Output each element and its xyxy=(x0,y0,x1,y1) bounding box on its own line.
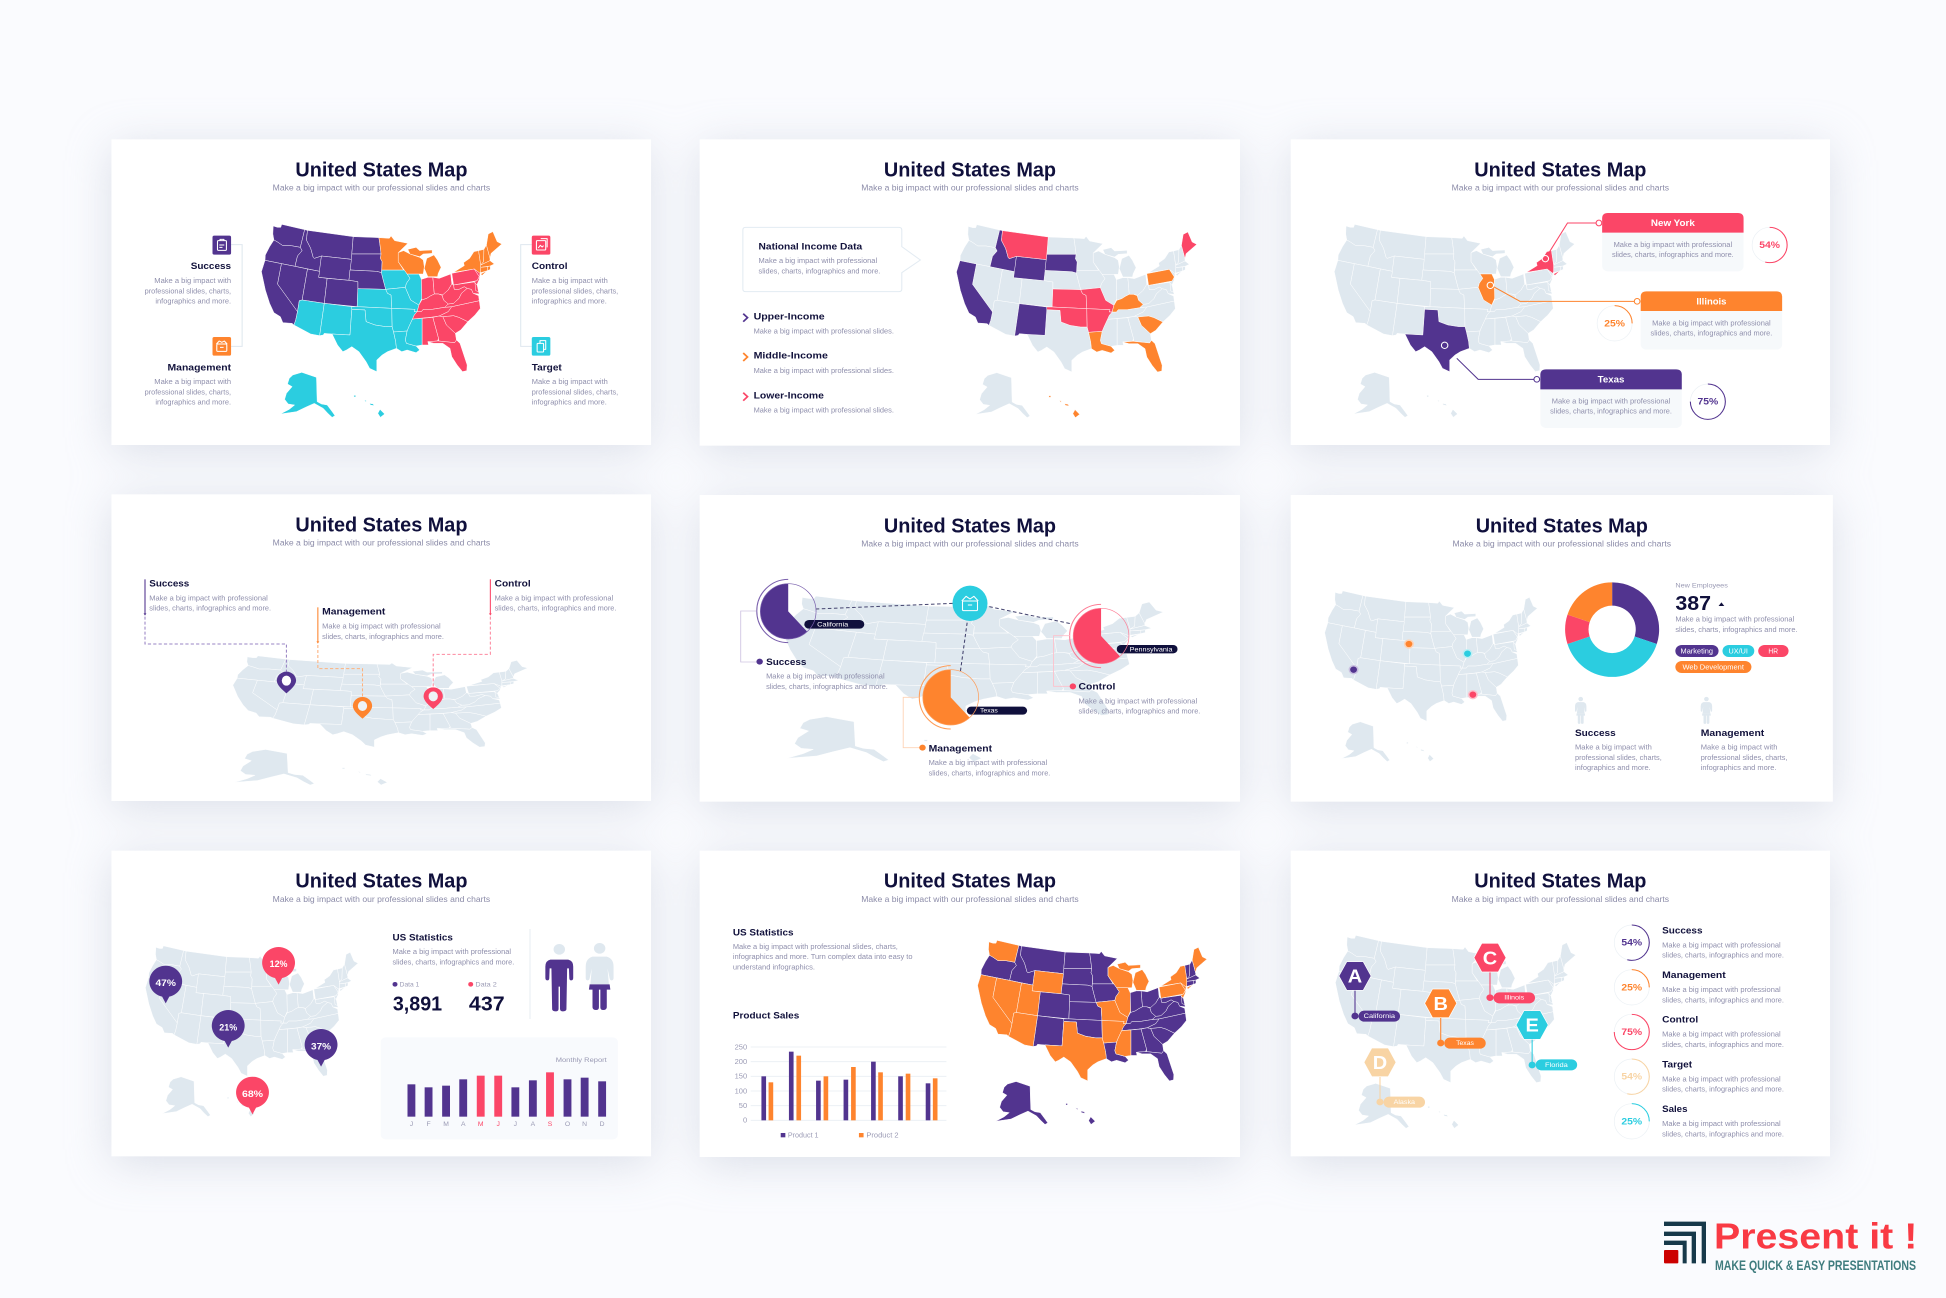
list item: success xyxy=(1614,925,1784,960)
icon: cyan box circle xyxy=(952,586,987,621)
text: success: professional slides, charts, xyxy=(1575,753,1662,762)
list item: control: Control xyxy=(1662,1015,1698,1026)
map: NY, IL, TX highlighted xyxy=(1334,224,1575,417)
percent ring: 25%: 25% xyxy=(1604,319,1625,329)
label: management xyxy=(903,697,1050,777)
marker: B Texas: Texas xyxy=(1456,1040,1475,1047)
legend pills: UX/UI xyxy=(1729,647,1748,655)
bar chart: monthly report: Monthly Report xyxy=(556,1057,607,1064)
card: new york: slides, charts, infographics and more. xyxy=(1612,250,1734,259)
text: success xyxy=(144,579,271,616)
list item: success: slides, charts, infographics and more. xyxy=(1662,951,1784,960)
text: us statistics: Make a big impact with professional slides, charts, xyxy=(733,942,898,951)
list item: target xyxy=(1614,1059,1784,1094)
list item: sales: 25% xyxy=(1621,1117,1643,1127)
balloon: 21% xyxy=(212,1010,245,1048)
stat: data 2 xyxy=(468,982,505,1015)
text: us statistics: US Statistics xyxy=(733,928,794,938)
bar chart: monthly report: D xyxy=(600,1121,605,1128)
marker: E Florida: Florida xyxy=(1545,1062,1568,1069)
list item: sales: Sales xyxy=(1662,1104,1687,1115)
callout: national income data: slides, charts, infographics and more. xyxy=(759,267,880,275)
panel: US statistics with balloons xyxy=(111,851,651,1156)
list item: lower income: Lower-Income xyxy=(754,391,825,401)
balloon: 37% xyxy=(305,1029,337,1067)
icon: control document xyxy=(532,236,550,255)
list item: upper income xyxy=(743,312,894,335)
label: management: Management xyxy=(929,744,993,754)
list item: target: Make a big impact with professional xyxy=(1662,1075,1781,1083)
text: target: Target xyxy=(532,363,563,373)
card: illinois xyxy=(1641,291,1782,350)
callout: national income data: National Income Data xyxy=(759,242,863,252)
text: management xyxy=(145,363,232,406)
icon: logo mark xyxy=(1664,1222,1706,1263)
label: control: slides, charts, infographics and more. xyxy=(1079,707,1200,716)
percent ring: 25% xyxy=(1597,306,1632,341)
text: control xyxy=(489,579,616,616)
map: two-colour states xyxy=(978,940,1207,1124)
label: management: Make a big impact with professional xyxy=(929,758,1047,767)
donut chart xyxy=(1565,582,1659,677)
title: United States Map xyxy=(295,514,467,536)
card: illinois: slides, charts, infographics and more. xyxy=(1651,329,1772,337)
label: management: slides, charts, infographics and more. xyxy=(929,769,1050,777)
text: success: professional slides, charts, xyxy=(145,287,231,295)
percent ring: 75% xyxy=(1690,384,1725,419)
callout: national income data: Make a big impact with professional xyxy=(759,256,877,265)
subtitle: Make a big impact with our professional slides and charts xyxy=(1452,183,1670,193)
text: success: slides, charts, infographics and more. xyxy=(149,604,271,613)
stat: data 2: 437 xyxy=(469,992,505,1015)
card: texas xyxy=(1540,369,1682,428)
text: management: professional slides, charts, xyxy=(145,388,231,396)
legend pills: Web Development xyxy=(1682,663,1744,671)
panel: new employees donut xyxy=(1291,495,1833,802)
map: highlighted income states xyxy=(956,225,1197,418)
list item: success: Success xyxy=(1662,926,1702,936)
balloon: 47%: 47% xyxy=(156,978,176,989)
text: success: Make a big impact with xyxy=(1575,743,1652,752)
title: United States Map xyxy=(1474,870,1646,892)
text: management: professional slides, charts, xyxy=(1701,753,1787,762)
list item: target: slides, charts, infographics and more. xyxy=(1662,1085,1784,1094)
label: success: slides, charts, infographics and more. xyxy=(766,682,888,691)
stat: new employees xyxy=(1675,583,1797,634)
logo: Present it xyxy=(1664,1216,1917,1273)
balloon: 68% xyxy=(236,1077,269,1114)
pie: pennsylvania: Pennsylvania xyxy=(1130,647,1173,653)
card: texas: Texas xyxy=(1598,375,1624,385)
bar chart: product sales: 250 xyxy=(735,1043,747,1051)
text: success: infographics and more. xyxy=(155,297,231,305)
stat: data 2: Data 2 xyxy=(475,982,497,988)
balloon: 37%: 37% xyxy=(311,1042,331,1052)
panel: national income data xyxy=(700,139,1240,446)
text: management: Management xyxy=(1701,728,1765,739)
panel: product sales xyxy=(700,851,1240,1157)
icon: man figure xyxy=(545,944,573,1011)
percent ring: 54%: 54% xyxy=(1759,240,1780,251)
text: success: Success xyxy=(191,261,231,272)
map: grey US xyxy=(1325,591,1537,762)
legend pills xyxy=(1675,645,1789,673)
text: success xyxy=(145,261,231,305)
text: control: Make a big impact with professional xyxy=(495,594,614,602)
bar chart: monthly report: M xyxy=(443,1121,449,1128)
list item: success: Make a big impact with professional xyxy=(1662,941,1781,949)
subtitle: Make a big impact with our professional slides and charts xyxy=(273,538,491,548)
pie: texas xyxy=(919,666,1027,729)
list item: success: 54% xyxy=(1621,938,1643,949)
text: success: Success xyxy=(149,579,189,589)
text: success xyxy=(1575,728,1662,772)
label: control: Make a big impact with professional xyxy=(1079,697,1197,705)
chart legend: Product 1 xyxy=(788,1131,819,1139)
dashed leader: management xyxy=(318,645,362,697)
title: United States Map xyxy=(1476,515,1648,537)
icon: person management xyxy=(1701,697,1712,724)
marker: D Alaska: D xyxy=(1373,1053,1387,1074)
dashed connectors xyxy=(816,603,1072,672)
text: management: Make a big impact with xyxy=(1701,743,1777,752)
dashed leader: control xyxy=(433,617,490,687)
text: control: Control xyxy=(495,579,531,589)
icon: success clipboard xyxy=(212,236,231,255)
list item: sales xyxy=(1614,1104,1784,1139)
list item: upper income: Upper-Income xyxy=(754,312,825,323)
text: management: infographics and more. xyxy=(1701,763,1776,772)
balloon: 68%: 68% xyxy=(242,1089,263,1100)
text: management: infographics and more. xyxy=(155,398,231,406)
bar chart: product sales: 100 xyxy=(735,1087,747,1095)
heading: product sales: Product Sales xyxy=(733,1011,799,1021)
text: success: Make a big impact with professional xyxy=(149,594,268,602)
list item: lower income: Make a big impact with professional slides. xyxy=(754,406,894,415)
list item: management: Make a big impact with professional xyxy=(1662,985,1781,994)
label: success: Make a big impact with professional xyxy=(766,672,885,681)
balloon: 12%: 12% xyxy=(270,959,288,970)
bar chart: monthly report: A xyxy=(531,1121,536,1128)
marker: A California: California xyxy=(1364,1013,1395,1020)
panel: hexagon markers with percentages xyxy=(1291,851,1830,1156)
text: target: infographics and more. xyxy=(532,398,607,406)
stat: new employees: New Employees xyxy=(1675,583,1729,590)
marker: B Texas: B xyxy=(1433,994,1448,1015)
bar chart: monthly report: O xyxy=(565,1121,570,1128)
list item: middle income xyxy=(743,351,894,375)
card: new york: New York xyxy=(1651,218,1696,228)
list item: control: 75% xyxy=(1621,1027,1643,1038)
marker: C Illinois xyxy=(1474,943,1535,1003)
legend pills: HR xyxy=(1768,647,1778,655)
text: control: infographics and more. xyxy=(532,297,607,305)
map: wide grey US xyxy=(233,656,528,785)
connector: texas xyxy=(1441,342,1540,382)
list item: management: slides, charts, infographics and more. xyxy=(1662,996,1784,1004)
pie: california: California xyxy=(817,622,849,628)
bar chart: monthly report: M xyxy=(478,1121,484,1128)
bar chart: product sales: 50 xyxy=(739,1101,747,1110)
text: us statistics: slides, charts, infographics and more. xyxy=(392,958,514,966)
label: success xyxy=(741,611,888,691)
list item: management xyxy=(1614,970,1784,1005)
pin: purple xyxy=(277,672,296,693)
bar chart: monthly report: J xyxy=(514,1121,517,1128)
text: success: infographics and more. xyxy=(1575,763,1651,772)
text: success: Success xyxy=(1575,728,1616,739)
stat: data 1: 3,891 xyxy=(393,992,442,1015)
stat: new employees: 387 xyxy=(1675,592,1711,615)
text: management: Management xyxy=(167,363,232,373)
pin: orange xyxy=(353,697,372,719)
text: management xyxy=(316,607,444,644)
panel: state callouts xyxy=(1291,139,1830,445)
chart legend: Product 2 xyxy=(866,1131,899,1139)
bar chart: product sales: 200 xyxy=(735,1057,747,1066)
bar chart: product sales xyxy=(735,1043,946,1125)
left bracket xyxy=(231,245,242,346)
panel: regions map with four categories xyxy=(111,139,651,445)
text: control: professional slides, charts, xyxy=(532,287,618,295)
connector: new york xyxy=(1542,220,1602,262)
list item: lower income xyxy=(743,391,894,415)
list item: middle income: Middle-Income xyxy=(754,351,829,362)
text: management xyxy=(1701,728,1787,772)
text: us statistics xyxy=(392,933,514,966)
map: grey US xyxy=(145,946,358,1117)
bar chart: monthly report: J xyxy=(497,1121,500,1128)
callout: national income data xyxy=(743,227,920,292)
bar chart: monthly report: J xyxy=(410,1121,413,1128)
stat: data 1 xyxy=(392,982,442,1015)
text: control: slides, charts, infographics and more. xyxy=(495,604,616,613)
text: management: slides, charts, infographics and more. xyxy=(322,632,444,641)
card shadows xyxy=(111,146,1833,1165)
list item: target: 54% xyxy=(1621,1072,1643,1083)
text: control: Control xyxy=(532,261,567,272)
marker: D Alaska: Alaska xyxy=(1394,1099,1415,1106)
bar chart: monthly report: A xyxy=(461,1121,466,1128)
title: United States Map xyxy=(884,159,1056,181)
list item: control: Make a big impact with professional xyxy=(1662,1030,1781,1039)
text: target xyxy=(532,363,618,406)
stat: new employees: Make a big impact with professional xyxy=(1675,615,1795,624)
marker: A California: A xyxy=(1348,966,1362,987)
subtitle: Make a big impact with our professional slides and charts xyxy=(861,894,1079,904)
pie: california xyxy=(757,579,864,643)
subtitle: Make a big impact with our professional slides and charts xyxy=(273,183,491,193)
list item: sales: Make a big impact with professional xyxy=(1662,1119,1781,1128)
card: texas: slides, charts, infographics and more. xyxy=(1550,407,1672,416)
map: stretched grey US xyxy=(784,596,1163,762)
bar chart: monthly report: F xyxy=(427,1121,431,1128)
subtitle: Make a big impact with our professional slides and charts xyxy=(861,539,1079,549)
text: management: Make a big impact with xyxy=(154,377,231,386)
subtitle: Make a big impact with our professional slides and charts xyxy=(273,894,491,904)
icon: person success xyxy=(1575,697,1586,724)
text: us statistics xyxy=(733,928,912,971)
label: control xyxy=(1054,636,1200,716)
balloon: 47% xyxy=(149,966,182,1003)
list item: management: Management xyxy=(1662,970,1727,981)
list item: control: slides, charts, infographics and more. xyxy=(1662,1040,1784,1049)
pie: texas: Texas xyxy=(980,708,999,715)
marker: A California xyxy=(1339,962,1400,1022)
marker: C Illinois: C xyxy=(1483,948,1497,969)
list item: sales: slides, charts, infographics and more. xyxy=(1662,1130,1784,1138)
title: United States Map xyxy=(1474,159,1646,181)
panel: pie charts over map xyxy=(700,495,1240,802)
text: management: Management xyxy=(322,607,386,618)
bar chart: monthly report xyxy=(381,1037,618,1139)
list item: middle income: Make a big impact with professional slides. xyxy=(754,366,894,375)
bar chart: product sales: 150 xyxy=(735,1072,747,1081)
text: us statistics: US Statistics xyxy=(392,933,453,943)
marker: C Illinois: Illinois xyxy=(1504,995,1525,1002)
chart legend xyxy=(781,1131,899,1139)
list item: control xyxy=(1614,1014,1784,1050)
balloon: 12% xyxy=(262,947,295,985)
list item: target: Target xyxy=(1662,1060,1693,1070)
text: success: Make a big impact with xyxy=(154,276,231,285)
percent ring: 54% xyxy=(1752,227,1787,263)
label: control: Control xyxy=(1079,682,1115,693)
logo wordmark: Present it ! xyxy=(1714,1216,1917,1257)
card: illinois: Make a big impact with professional xyxy=(1652,319,1771,327)
map: grey US xyxy=(1335,935,1576,1128)
text: target: Make a big impact with xyxy=(532,377,608,386)
bar chart: product sales: 0 xyxy=(743,1116,747,1125)
title: United States Map xyxy=(884,515,1056,537)
text: control xyxy=(532,261,618,305)
bar chart: monthly report: S xyxy=(548,1121,553,1128)
list item: upper income: Make a big impact with professional slides. xyxy=(754,327,894,335)
connector: illinois xyxy=(1487,282,1640,304)
bar chart: monthly report: N xyxy=(582,1121,587,1128)
marker: E Florida xyxy=(1516,1011,1577,1070)
text: us statistics: Make a big impact with professional xyxy=(392,947,511,956)
balloon: 21%: 21% xyxy=(219,1023,238,1033)
marker: D Alaska xyxy=(1364,1048,1425,1108)
subtitle: Make a big impact with our professional slides and charts xyxy=(1452,539,1672,549)
card: texas: Make a big impact with professional xyxy=(1552,397,1671,406)
list item: management: 25% xyxy=(1621,983,1643,993)
title: United States Map xyxy=(295,870,467,892)
label: success: Success xyxy=(766,657,806,668)
stat: data 1: Data 1 xyxy=(400,982,420,988)
text: management: Make a big impact with professional xyxy=(322,622,441,631)
icon: woman figure xyxy=(586,943,614,1010)
text: target: professional slides, charts, xyxy=(532,388,618,396)
pin: pink xyxy=(424,687,443,709)
subtitle: Make a big impact with our professional slides and charts xyxy=(1452,894,1670,904)
title: United States Map xyxy=(295,159,467,181)
marker: B Texas xyxy=(1425,989,1486,1049)
card: illinois: Illinois xyxy=(1696,297,1726,306)
pie: pennsylvania xyxy=(1070,604,1177,668)
title: United States Map xyxy=(884,870,1056,892)
card: new york xyxy=(1602,213,1744,271)
panel: map pins with dashed leaders xyxy=(111,494,651,801)
right bracket xyxy=(521,245,532,346)
marker: E Florida: E xyxy=(1525,1015,1539,1036)
stat: new employees: slides, charts, infographics and more. xyxy=(1675,625,1797,634)
percent ring: 75%: 75% xyxy=(1697,397,1719,408)
icon: management box xyxy=(212,337,231,356)
text: us statistics: infographics and more. Turn complex data into easy to xyxy=(733,952,912,961)
icon: target file xyxy=(532,337,550,356)
dashed leader: success xyxy=(145,617,286,672)
text: control: Make a big impact with xyxy=(532,276,608,285)
subtitle: Make a big impact with our professional slides and charts xyxy=(861,183,1079,193)
map: four-colour regions xyxy=(261,224,502,417)
card: new york: Make a big impact with professional xyxy=(1614,240,1732,249)
map dots xyxy=(1349,639,1478,699)
text: us statistics: understand infographics. xyxy=(733,963,815,971)
legend pills: Marketing xyxy=(1681,647,1713,655)
